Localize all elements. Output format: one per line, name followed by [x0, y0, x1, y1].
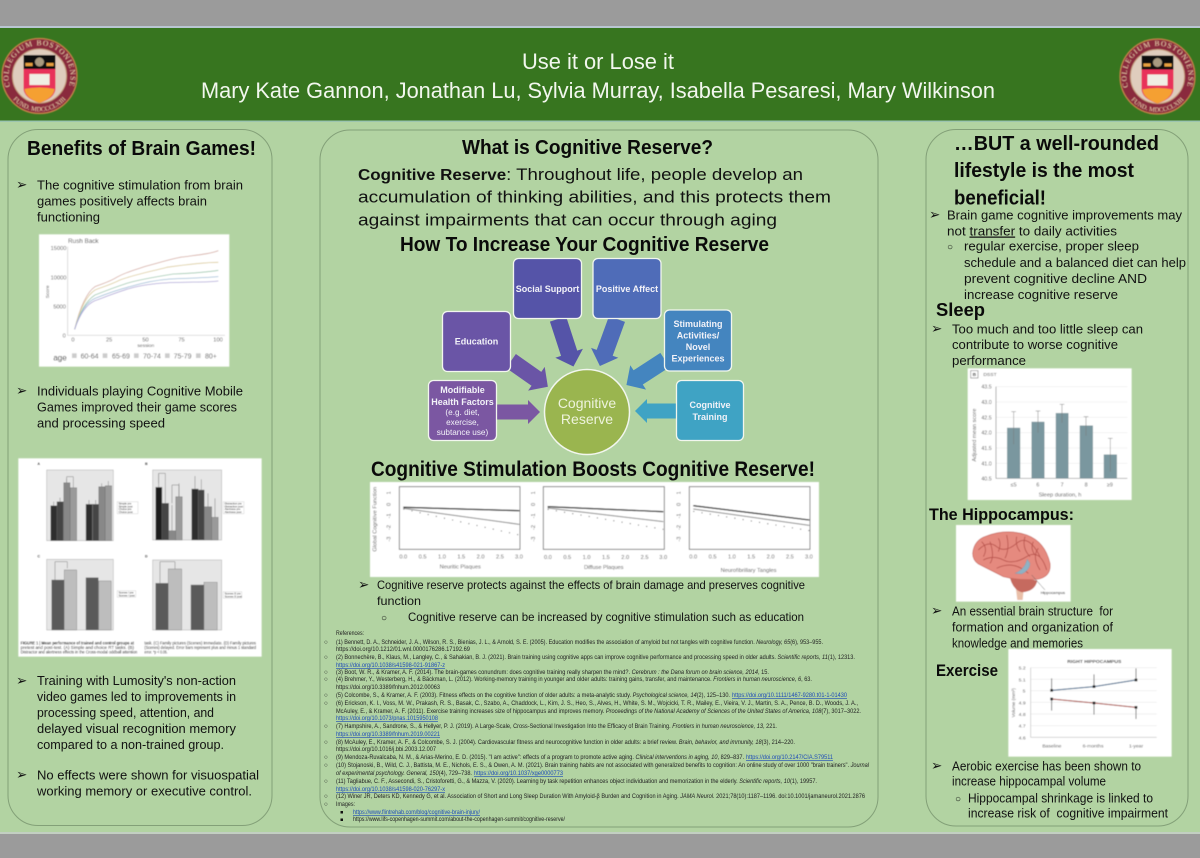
chart: global cognitive function line plots: Diffuse Plaques — [584, 565, 624, 571]
text block: no effects: No effects were shown for visuospatial — [37, 768, 259, 782]
text block: aerobic exercise: increase hippocampal volume — [952, 774, 1106, 788]
references list: ○ — [324, 801, 328, 808]
chart: DSST score by sleep duration: 41.5 — [981, 446, 992, 452]
references list: https://doi.org/10.1038/s41598-021-91867-z — [336, 662, 445, 669]
arrow: modifiable health factors — [497, 400, 540, 424]
definition text — [358, 165, 831, 230]
circle: cognitive reserve: Cognitive — [558, 395, 616, 411]
chart: global cognitive function line plots: 0.5 — [563, 555, 571, 561]
chart: mean performance bar figure: FIGURE 1 | Mean performance of trained and control groups at — [21, 640, 134, 645]
arrow: education — [503, 349, 556, 399]
chart: rush back score by age: 50 — [142, 337, 149, 343]
chart: global cognitive function line plots: 1 — [677, 491, 683, 494]
text block: cognitive stimulation: The cognitive stimulation from brain — [37, 178, 243, 192]
text block: aerobic exercise: Hippocampal shrinkage is linked to — [968, 792, 1153, 806]
references list: (9) Mendoza-Ruvalcaba, N. M., & Arias-Merino, E. D. (2015). "I am active": effects of a program to promote active aging. Clinical interventions in aging, 10, 829–837. — [336, 754, 744, 761]
box: cognitive training: Cognitive — [689, 400, 731, 410]
chart: right hippocampus volume: 6-months — [1083, 744, 1104, 750]
chart: mean performance bar figure: task. (C) Family pictures (Scenes) Immediate. (D) Family pictures — [144, 640, 257, 645]
text block: sleep: Too much and too little sleep can — [952, 322, 1143, 336]
chart: mean performance bar figure: Scenes D post — [225, 595, 242, 599]
text block: cognitive stimulation: ➢ — [16, 177, 27, 193]
chart: DSST score by sleep duration: 8 — [1085, 482, 1088, 488]
references list: https://doi.org/10.1037/xge0000773 — [474, 770, 563, 777]
references list: ○ — [324, 669, 328, 676]
chart: rush back score by age: 75-79 — [174, 354, 192, 361]
chart: rush back score by age — [39, 234, 229, 367]
icon: left university seal: COLLEGIUM BOSTONIENSE — [2, 40, 76, 88]
text block: brain game limits: regular exercise, proper sleep — [964, 240, 1139, 254]
title: Use it or Lose it — [522, 49, 674, 74]
chart: global cognitive function line plots — [370, 482, 819, 577]
text block: lumosity training: delayed visual recognition memory — [37, 722, 237, 736]
box: stimulating activities — [664, 310, 732, 371]
chart: right hippocampus volume: 5 — [1023, 689, 1026, 695]
text block: essential structure: An essential brain structure for — [952, 604, 1113, 618]
text block: cognitive mobile games: and processing speed — [37, 416, 165, 430]
references list: https://doi.org/10.1111/1467-9280.t01-1-01430 — [732, 692, 847, 699]
heading: how to increase: How To Increase Your Cognitive Reserve — [400, 234, 769, 256]
icon: left university seal: FUND. MDCCCLXIII — [12, 96, 66, 112]
chart: mean performance bar figure: Alertness pre — [225, 507, 241, 511]
heading: well-rounded lifestyle — [954, 133, 1159, 210]
chart: DSST score by sleep duration: Sleep duration, h — [1039, 493, 1081, 499]
references list — [324, 630, 870, 823]
chart: rush back score by age: session — [137, 343, 154, 349]
text block: brain game limits: prevent cognitive decline AND — [964, 272, 1147, 286]
text block: lumosity training: video games led to improvements in — [37, 690, 236, 704]
text block: lumosity training: processing speed, attention, and — [37, 706, 214, 720]
panel: benefits of brain games — [8, 130, 272, 826]
text block: sleep: ➢ — [931, 321, 942, 337]
references list: (10) Stojanoski, B., Wild, C. J., Battista, M. E., Nichols, E. S., & Owen, A. M. (2021). Brain training habits are not associated with generalized benefits to cognition: An online study of over 1000 "brain trainers". Journal — [336, 762, 870, 769]
definition text: accumulation of thinking abilities, and this protects them — [358, 188, 831, 206]
chart: mean performance bar figure: D — [145, 554, 148, 558]
chart: global cognitive function line plots: 2.0 — [621, 555, 629, 561]
chart: right hippocampus volume: 4.6 — [1019, 735, 1026, 741]
chart: DSST score by sleep duration: 6 — [1036, 482, 1039, 488]
chart: DSST score by sleep duration: 43.0 — [981, 400, 992, 406]
chart: DSST score by sleep duration: 42.0 — [981, 431, 992, 437]
icon: brain illustration — [956, 525, 1071, 602]
chart: DSST score by sleep duration: 42.5 — [981, 415, 992, 421]
references list: https://doi.org/10.2147/CIA.S79511 — [746, 754, 833, 761]
chart: global cognitive function line plots: -1 — [677, 513, 683, 518]
chart: rush back score by age: age — [53, 353, 67, 362]
chart: global cognitive function line plots: -2 — [677, 525, 683, 530]
chart: mean performance bar figure: B — [145, 462, 148, 466]
chart: rush back score by age: Rush Back — [68, 238, 99, 245]
chart: global cognitive function line plots: -3 — [387, 537, 393, 542]
box: stimulating activities: Novel — [686, 342, 710, 352]
icon: right university seal — [1118, 38, 1196, 116]
text block: aerobic exercise: ➢ — [931, 758, 942, 774]
chart: mean performance bar figure: Simple pre — [119, 501, 132, 505]
icon: left university seal — [0, 37, 78, 115]
chart: rush back score by age: 65-69 — [112, 354, 130, 361]
box: cognitive training — [676, 380, 744, 440]
icon: right university seal: FUND. MDCCCLXIII — [1130, 96, 1184, 113]
references list: (11) Tagliabue, C. F., Assecondi, S., Cristoforetti, G., & Mazza, V. (2020). Learning by task repetition enhances object individuation and memorization in the elderly. Scientific reports, 10(1), 19957. — [336, 778, 817, 785]
text block: brain game limits: ➢ — [929, 207, 940, 223]
chart: right hippocampus volume: 5.1 — [1019, 677, 1026, 683]
chart: rush back score by age: 5000 — [53, 304, 66, 310]
chart: right hippocampus volume: 4.9 — [1019, 700, 1026, 706]
chart: global cognitive function line plots: 1.0 — [728, 554, 736, 560]
heading: exercise: Exercise — [936, 661, 998, 680]
chart: mean performance bar figure: A — [37, 462, 40, 466]
text block: essential structure — [931, 603, 1114, 650]
text block: aerobic exercise: Aerobic exercise has been shown to — [952, 760, 1141, 774]
references list: ○ — [324, 639, 328, 646]
chart: global cognitive function line plots: 2.5 — [496, 554, 504, 560]
references list: ○ — [324, 676, 328, 683]
chart: global cognitive function line plots: 1.5 — [747, 554, 755, 560]
box: modifiable health factors — [428, 380, 496, 440]
chart: mean performance bar figure: Scenes I pre — [119, 591, 134, 595]
references list: ○ — [324, 723, 328, 730]
chart: DSST score by sleep duration: DSST — [983, 372, 997, 378]
text block: lumosity training: Training with Lumosity's non-action — [37, 674, 236, 688]
header banner — [0, 28, 1200, 122]
chart: mean performance bar figure: Simple post — [119, 504, 133, 508]
text block: lumosity training — [16, 673, 237, 752]
chart: global cognitive function line plots: 3.0 — [659, 555, 667, 561]
references list: https://doi.org/10.1016/j.bbi.2003.12.007 — [336, 746, 436, 753]
text block: cognitive mobile games: ➢ — [16, 383, 27, 399]
references list: https://doi.org/10.1038/s41598-020-76297-x — [336, 786, 446, 793]
text block: essential structure: knowledge and memories — [952, 636, 1083, 650]
text block: cognitive mobile games — [16, 383, 243, 430]
references list: ○ — [324, 793, 328, 800]
text block: reserve protects: ○ — [381, 613, 387, 624]
references list: (4) Brehmer, Y., Westerberg, H., & Bäckman, L. (2012). Working-memory training in younger and older adults: training gains, transfer, and maintenance. Frontiers in human neuroscience, 6, 63. — [336, 676, 812, 683]
text block: aerobic exercise — [931, 758, 1169, 820]
chart: right hippocampus volume: 4.8 — [1019, 712, 1026, 718]
references list: https://doi.org/10.1212/01.wnl.0000176286.17192.69 — [336, 646, 470, 653]
chart: mean performance bar figure: pretest and post-test. (A) Simple and choice RT tasks. (B) — [21, 645, 134, 650]
heading: well-rounded lifestyle: …BUT a well-rounded — [954, 133, 1159, 155]
text block: cognitive mobile games: Individuals playing Cognitive Mobile — [37, 384, 243, 398]
chart: mean performance bar figure: error. *p < 0.05. — [144, 650, 168, 655]
heading: well-rounded lifestyle: lifestyle is the most — [954, 160, 1134, 182]
definition text: Cognitive Reserve : Throughout life, people develop an — [358, 165, 803, 184]
chart: global cognitive function line plots: -2 — [387, 525, 393, 530]
references list: McAuley, E., & Kramer, A. F. (2011). Exercise training increases size of hippocampus and improves memory. Proceedings of the National Academy of Sciences of the United States of America, 108(7), 3017–3022. — [336, 708, 861, 715]
references list: ○ — [324, 692, 328, 699]
chart: global cognitive function line plots: -3 — [677, 537, 683, 542]
chart: mean performance bar figure: Distractor and alertness effects in the Cross-modal oddball attention — [21, 650, 138, 655]
references list: ○ — [324, 778, 328, 785]
heading: sleep: Sleep — [936, 300, 985, 320]
definition text: against impairments that can occur through aging — [358, 210, 777, 230]
arrow: stimulating activities — [619, 348, 673, 397]
references list: (7) Hampshire, A., Sandrone, S., & Hellyer, P. J. (2019). A Large-Scale, Cross-Sectional Investigation Into the Efficacy of Brain Training. Frontiers in human neuroscience, 13, 221. — [336, 723, 777, 730]
chart: rush back score by age: 100 — [213, 337, 223, 343]
references list: References: — [336, 630, 364, 637]
references list: (8) McAuley, E., Kramer, A. F., & Colcombe, S. J. (2004). Cardiovascular fitness and neurocognitive function in older adults: a brief review. Brain, behavior, and immunity, 18(3), 214–220. — [336, 739, 795, 746]
chart: mean performance bar figure: Scenes I post — [119, 594, 135, 598]
text block: no effects: ➢ — [16, 767, 27, 783]
text block: sleep — [931, 321, 1143, 368]
references list: (1) Bennett, D. A., Schneider, J. A., Wilson, R. S., Bienias, J. L., & Arnold, S. E. (2005). Education modifies the association of amyloid but not tangles with cognitive function. Neurology, 65(6), 953–955. — [336, 639, 823, 646]
chart: global cognitive function line plots: -3 — [531, 537, 537, 542]
chart: global cognitive function line plots: Neuritic Plaques — [440, 564, 481, 570]
chart: right hippocampus volume: 5.2 — [1019, 666, 1026, 672]
chart: DSST score by sleep duration: ≤5 — [1011, 482, 1017, 488]
chart: global cognitive function line plots: 0 — [677, 503, 683, 506]
text block: cognitive stimulation: games positively affects brain — [37, 194, 207, 208]
text block: sleep: performance — [952, 354, 1026, 368]
chart: global cognitive function line plots: Neurofibrillary Tangles — [721, 568, 777, 574]
chart: global cognitive function line plots: 0 — [387, 503, 393, 506]
text block: cognitive mobile games: Games improved their game scores — [37, 400, 237, 414]
chart: global cognitive function line plots: 2.5 — [641, 555, 649, 561]
panel: well-rounded lifestyle — [926, 130, 1188, 826]
authors: Mary Kate Gannon, Jonathan Lu, Sylvia Murray, Isabella Pesaresi, Mary Wilkinson — [201, 78, 995, 103]
references list: (6) Erickson, K. I., Voss, M. W., Prakash, R. S., Basak, C., Szabo, A., Chaddock, L., Kim, J. S., Heo, S., Alves, H., White, S. M., Wojcicki, T. R., Mailey, E., Vieira, V. J., Martin, S. A., Pence, B. D., Woods, J. A., — [336, 700, 858, 707]
box: education: Education — [455, 336, 498, 346]
references list: (12) Winer JR, Deters KD, Kennedy G, et al. Association of Short and Long Sleep Duration With Amyloid-β Burden and Cognition in Aging. JAMA Neurol. 2021;78(10):1187–1196. doi:10.1001/jamaneurol.2021.2876 — [336, 793, 865, 800]
chart: global cognitive function line plots: -1 — [387, 513, 393, 518]
chart: right hippocampus volume: Volume (mm³) — [1011, 688, 1016, 717]
text block: brain game limits: Brain game cognitive improvements may — [947, 208, 1183, 222]
references list: ○ — [324, 739, 328, 746]
references list: ○ — [324, 762, 328, 769]
chart: DSST score by sleep duration: 7 — [1061, 482, 1064, 488]
references list: https://doi.org/10.3389/fnhum.2012.00063 — [336, 684, 440, 691]
chart: global cognitive function line plots: 0.5 — [419, 554, 427, 560]
chart: global cognitive function line plots: 3.0 — [805, 554, 813, 560]
chart: global cognitive function line plots: 0.0 — [689, 554, 697, 560]
text block: brain game limits: ○ — [947, 242, 953, 253]
references list: ○ — [324, 654, 328, 661]
references list: (3) Boot, W. R., & Kramer, A. F. (2014). The brain-games conundrum: does cognitive training really sharpen the mind?. Cerebrum : the Dana forum on brain science, 2014, 15. — [336, 669, 769, 676]
chart: right hippocampus volume: RIGHT HIPPOCAMPUS — [1067, 659, 1121, 664]
chart: global cognitive function line plots: -2 — [531, 525, 537, 530]
box: stimulating activities: Stimulating — [674, 319, 722, 329]
text block: essential structure: formation and organization of — [952, 620, 1114, 634]
circle: cognitive reserve: Reserve — [561, 411, 613, 427]
chart: global cognitive function line plots: -1 — [531, 513, 537, 518]
text block: reserve protects: Cognitive reserve can be increased by cognitive stimulation such as education — [408, 610, 804, 624]
references list: https://doi.org/10.3389/fnhum.2019.00221 — [336, 731, 440, 738]
icon: brain illustration: Hippocampus — [1041, 590, 1065, 595]
chart: right hippocampus volume: 4.7 — [1019, 724, 1026, 730]
chart: mean performance bar figure: (Scenes) delayed. Error bars represent plus and minus 1 standard — [144, 645, 256, 650]
box: cognitive training: Training — [692, 412, 728, 422]
heading: the hippocampus: The Hippocampus: — [929, 505, 1074, 524]
text block: no effects: working memory or executive control. — [36, 784, 252, 798]
chart: rush back score by age: 0 — [71, 337, 74, 343]
chart: global cognitive function line plots: 3.0 — [515, 554, 523, 560]
chart: global cognitive function line plots: 2.0 — [477, 554, 485, 560]
box: positive affect — [593, 258, 661, 318]
chart: rush back score by age: 15000 — [51, 246, 66, 252]
chart: global cognitive function line plots: 1.5 — [602, 555, 610, 561]
chart: mean performance bar figure: Distraction post — [225, 504, 243, 508]
text block: reserve protects: Cognitive reserve protects against the effects of brain damage and preserves cognitive — [377, 578, 805, 592]
chart: DSST score by sleep duration: Adjusted mean score — [972, 409, 978, 462]
arrow: cognitive training — [635, 399, 676, 423]
chart: global cognitive function line plots: Global Cognitive Function — [373, 487, 379, 552]
chart: global cognitive function line plots: 1.5 — [457, 554, 465, 560]
references list: ○ — [324, 700, 328, 707]
arrow: social support — [544, 315, 587, 371]
chart: global cognitive function line plots: 2.5 — [786, 554, 794, 560]
text block: cognitive stimulation: functioning — [37, 210, 100, 224]
chart: rush back score by age: 10000 — [51, 275, 66, 281]
chart: DSST score by sleep duration: 43.5 — [981, 385, 992, 391]
diagram: factors feeding cognitive reserve — [428, 258, 744, 454]
box: education — [442, 312, 510, 372]
chart: mean performance bar figure — [18, 458, 262, 657]
chart: global cognitive function line plots: 2.0 — [767, 554, 775, 560]
references list: https://doi.org/10.1073/pnas.1015950108 — [336, 715, 438, 722]
chart: global cognitive function line plots: 1 — [387, 491, 393, 494]
chart: rush back score by age: 80+ — [205, 354, 217, 361]
circle: cognitive reserve — [544, 370, 630, 454]
text block: cognitive stimulation — [16, 177, 243, 224]
chart: DSST score by sleep duration: ≥9 — [1107, 482, 1113, 488]
text block: reserve protects: ➢ — [358, 577, 369, 593]
chart: DSST score by sleep duration: 41.0 — [981, 461, 992, 467]
chart: mean performance bar figure: Choice pre — [119, 507, 132, 511]
references list: (2) Bonnechère, B., Klaus, M., Langley, C., & Sahakian, B. J. (2021). Brain training using cognitive apps can improve cognitive performance and processing speed in older adults. Scientific reports, 11(1), 12313. — [336, 654, 855, 661]
text block: aerobic exercise: increase risk of cognitive impairment — [968, 806, 1169, 820]
box: stimulating activities: Activities/ — [677, 330, 720, 340]
references list: (5) Colcombe, S., & Kramer, A. F. (2003). Fitness effects on the cognitive function of older adults: a meta-analytic study. Psychological science, 14(2), 125–130. — [336, 692, 730, 699]
heading: benefits: Benefits of Brain Games! — [27, 138, 256, 160]
chart: right hippocampus volume: Baseline — [1042, 744, 1062, 750]
box: stimulating activities: Experiences — [671, 354, 725, 364]
chart: global cognitive function line plots: 0.0 — [399, 554, 407, 560]
heading: well-rounded lifestyle: beneficial! — [954, 188, 1046, 210]
chart: global cognitive function line plots: 1.0 — [583, 555, 591, 561]
chart: global cognitive function line plots: 0.5 — [709, 554, 717, 560]
arrow: positive affect — [586, 314, 631, 371]
chart: rush back score by age: 0 — [63, 333, 66, 339]
text block: no effects — [16, 767, 259, 798]
text block: brain game limits: not transfer to daily activities — [947, 224, 1117, 238]
icon: right university seal: COLLEGIUM BOSTONIENSE — [1120, 40, 1194, 88]
text block: aerobic exercise: ○ — [955, 794, 961, 805]
chart: rush back score by age: Score — [45, 285, 51, 298]
chart: global cognitive function line plots: 1.0 — [438, 554, 446, 560]
chart: mean performance bar figure: Scenes D pre — [225, 592, 241, 596]
text block: brain game limits — [929, 207, 1186, 302]
chart: mean performance bar figure: Choice post — [119, 510, 133, 514]
heading: cognitive stimulation boosts reserve: Cognitive Stimulation Boosts Cognitive Reserve! — [371, 458, 815, 481]
text block: reserve protects — [358, 577, 805, 624]
text block: sleep: contribute to worse cognitive — [952, 338, 1118, 352]
chart: rush back score by age: 60-64 — [81, 354, 99, 361]
chart: mean performance bar figure: C — [37, 554, 40, 558]
chart: mean performance bar figure: Distraction pre — [225, 501, 242, 505]
references list: Images: — [336, 801, 355, 808]
box: modifiable health factors: (e.g. diet, — [445, 408, 480, 417]
chart: global cognitive function line plots: 0.0 — [544, 555, 552, 561]
chart: DSST score by sleep duration: B — [973, 372, 977, 377]
box: positive affect: Positive Affect — [596, 284, 658, 294]
references list: of experimental psychology. General, 150(4), 729–738. — [336, 770, 472, 777]
references list: https://www.flintrehab.com/blog/cognitive-brain-injury/ — [353, 809, 480, 816]
text block: essential structure: ➢ — [931, 603, 942, 619]
chart: DSST score by sleep duration — [968, 368, 1132, 500]
chart: right hippocampus volume — [1008, 649, 1172, 757]
box: modifiable health factors: exercise, — [446, 418, 479, 427]
chart: rush back score by age: 25 — [106, 337, 112, 343]
panel: what is cognitive reserve — [320, 130, 878, 827]
chart: global cognitive function line plots: 0 — [531, 503, 537, 506]
chart: mean performance bar figure: Alertness post — [225, 510, 242, 514]
box: modifiable health factors: subtance use) — [437, 428, 488, 437]
references list: https://www.lifs-copenhagen-summit.com/about-the-copenhagen-summit/cognitive-reserve/ — [353, 816, 565, 823]
chart: rush back score by age: 75 — [178, 337, 185, 343]
chart: right hippocampus volume: 1-year — [1129, 744, 1143, 750]
text block: lumosity training: ➢ — [16, 673, 27, 689]
box: social support — [514, 258, 582, 318]
heading: what is cognitive reserve: What is Cognitive Reserve? — [462, 137, 713, 159]
chart: rush back score by age: 70-74 — [143, 354, 161, 361]
text block: brain game limits: increase cognitive reserve — [964, 288, 1118, 302]
box: modifiable health factors: Health Factors — [431, 397, 494, 407]
text block: reserve protects: function — [377, 594, 421, 608]
box: social support: Social Support — [516, 284, 579, 294]
text block: brain game limits: schedule and a balanced diet can help — [964, 256, 1186, 270]
chart: DSST score by sleep duration: 40.5 — [981, 476, 992, 482]
text block: lumosity training: compared to a non-trained group. — [37, 738, 224, 752]
chart: global cognitive function line plots: 1 — [531, 491, 537, 494]
references list: ○ — [324, 754, 328, 761]
box: modifiable health factors: Modifiable — [440, 385, 485, 395]
